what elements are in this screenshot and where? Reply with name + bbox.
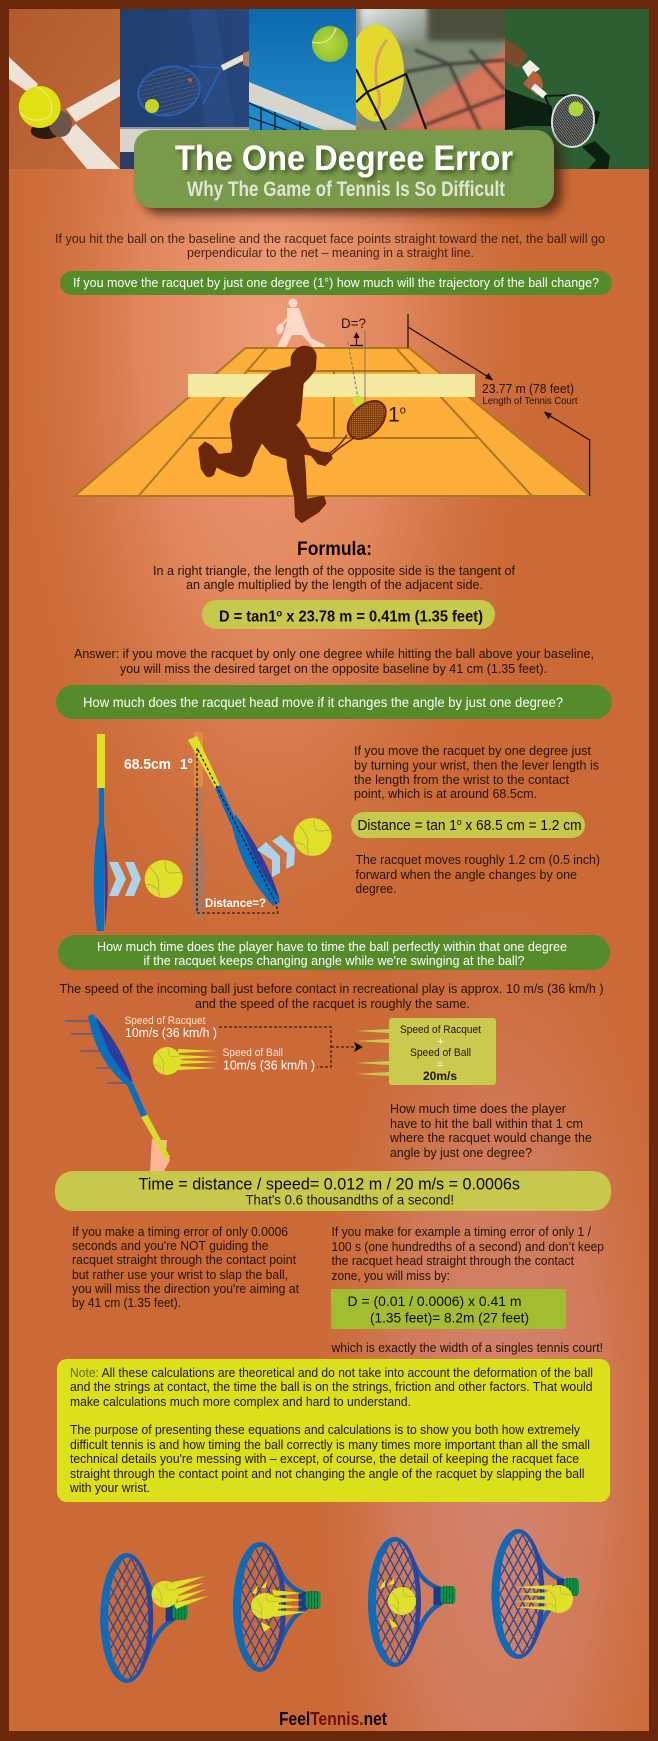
miss distance box: [331, 1289, 566, 1329]
intro text: If you hit the ball on the baseline and the racquet face points straight toward the net, the ball will go: [55, 232, 605, 246]
note panel: straight through the contact point and not changing the angle of the racquet by slapping the ball: [70, 1467, 584, 1481]
incoming ball speed text: [60, 982, 604, 1011]
timing error left text: If you make a timing error of only 0.0006: [72, 1225, 288, 1239]
icon: far player silhouette: [275, 298, 325, 347]
racquet movement text: degree.: [356, 882, 396, 896]
question bar 3: if the racquet keeps changing angle while we're swinging at the ball?: [144, 953, 524, 968]
timing error left text: [72, 1225, 300, 1310]
timing error left text: by 41 cm (1.35 feet).: [72, 1296, 181, 1310]
subtitle: Why The Game of Tennis Is So Difficult: [187, 178, 505, 201]
formula pill: D = tan1: [219, 608, 280, 626]
icon: chevrons left: [109, 862, 141, 896]
time pill: Time = distance / speed= 0.012 m / 20 m/s = 0.0006s: [138, 1174, 520, 1194]
question bar 1: If you move the racquet by just one degree (1°) how much will the trajectory of the ball change?: [73, 275, 599, 290]
miss distance box: (1.35 feet)= 8.2m (27 feet): [370, 1310, 529, 1326]
label: lever length and angle: 1°: [180, 756, 193, 773]
question bar 2: [56, 685, 612, 719]
sum box speed trails: [356, 1029, 389, 1076]
note panel: difficult tennis is and how timing the ball correctly is many times more important than all the small: [70, 1438, 590, 1452]
icon: ball left: [145, 860, 183, 898]
label: speed of racquet: 10m/s (36 km/h ): [125, 1025, 217, 1040]
racquet sequence 1: ball leaving: [100, 1553, 209, 1683]
icon: chevrons right: [257, 835, 295, 877]
time pill: [55, 1171, 611, 1211]
label: speed of ball: 10m/s (36 km/h ): [223, 1058, 315, 1072]
racquet sequence 4: ball at rest behind strings: [492, 1529, 579, 1659]
note panel: and the strings at contact, the time the ball is on the strings, friction and other factors. That would: [70, 1380, 593, 1394]
distance pill: o: [457, 817, 462, 827]
question: time in 1 cm: have to hit the ball within that 1 cm: [390, 1117, 583, 1131]
lever explanation: the length from the wrist to the contact: [354, 773, 570, 787]
note panel: technical details you're messing with – except, of course, the detail of keeping the racquet face: [70, 1452, 579, 1466]
distance geometry dashes: [197, 748, 278, 913]
answer text: Answer: if you move the racquet by only one degree while hitting the ball above your baseline,: [74, 647, 594, 661]
note panel: The purpose of presenting these equations and calculations is to show you both how extremely: [70, 1423, 581, 1437]
lever explanation: by turning your wrist, then the lever length is: [354, 758, 599, 772]
timing error left text: racquet straight through the contact point: [72, 1253, 297, 1267]
title banner: [134, 130, 562, 214]
distance pill: x 68.5 cm = 1.2 cm: [462, 818, 582, 834]
label: one degree: 1: [388, 404, 400, 426]
label: one degree: o: [400, 404, 406, 416]
question: time in 1 cm: where the racquet would change the: [389, 1131, 592, 1145]
label: speed of ball: [222, 1047, 315, 1072]
timing error right text: If you make for example a timing error of only 1 /: [332, 1225, 592, 1239]
note panel: make calculations much more complex and hard to understand.: [70, 1395, 411, 1409]
answer text: you will miss the desired target on the opposite baseline by 41 cm (1.35 feet).: [120, 662, 547, 676]
lever explanation: [354, 744, 599, 801]
intro text: perpendicular to the net – meaning in a straight line.: [187, 246, 474, 260]
question bar 3: [58, 935, 610, 970]
icon: straight racquet side view: [94, 734, 108, 931]
label: speed of ball: Speed of Ball: [222, 1047, 283, 1059]
question: time in 1 cm: How much time does the player: [390, 1102, 566, 1116]
icon: ball right: [294, 818, 332, 856]
answer text: [74, 647, 594, 676]
sum box: Speed of Ball: [410, 1047, 471, 1059]
miss distance box: D = (0.01 / 0.0006) x 0.41 m: [348, 1293, 522, 1309]
incoming ball speed text: and the speed of the racquet is roughly the same.: [195, 997, 470, 1011]
photo: close-up of ball in net: [356, 9, 505, 130]
tennis court diagram: [75, 348, 590, 496]
label: speed of racquet: Speed of Racquet: [124, 1015, 206, 1027]
photo: ball on clay court line: [9, 9, 120, 169]
sum box: Speed of Racquet: [400, 1024, 481, 1036]
icon: racquet and ball: [325, 394, 393, 456]
distance pill: Distance = tan 1: [358, 818, 463, 834]
icon: near player silhouette: [199, 347, 332, 522]
trajectory lines and D marker: D=?: [341, 315, 366, 331]
photo: racquet hitting ball on blue background: [120, 9, 249, 169]
racquet movement text: [356, 853, 600, 896]
label: court length: [482, 381, 578, 407]
formula explanation: In a right triangle, the length of the opposite side is the tangent of: [153, 564, 516, 578]
photo: racquet on green court: [505, 9, 649, 169]
intro text: [55, 232, 605, 260]
sum box: 20m/s: [423, 1069, 457, 1083]
label: court length: Length of Tennis Court: [482, 395, 578, 407]
distance pill: [351, 812, 585, 838]
formula pill: x 23.78 m = 0.41m (1.35 feet): [282, 608, 483, 626]
question: time in 1 cm: angle by just one degree?: [390, 1146, 532, 1160]
icon: ball with speed trails: [153, 1047, 220, 1075]
lever explanation: point, which is at around 68.5cm.: [354, 787, 537, 801]
incoming ball speed text: The speed of the incoming ball just before contact in recreational play is approx. 10 m/s (36 km/h ): [60, 982, 604, 996]
time pill: That's 0.6 thousandths of a second!: [246, 1192, 454, 1208]
lever explanation: If you move the racquet by one degree just: [354, 744, 592, 758]
note panel: [57, 1359, 610, 1502]
formula explanation: an angle multiplied by the length of the adjacent side.: [186, 578, 483, 592]
racquet sequence 2: ball approaching strings: [233, 1542, 320, 1672]
timing error right text: zone, you will miss by:: [332, 1269, 450, 1283]
timing error left text: seconds and you're NOT guiding the: [72, 1239, 269, 1253]
icon: racquet with speed lines and hand: [65, 1014, 170, 1171]
formula explanation: [153, 564, 516, 592]
note panel: with your wrist.: [69, 1481, 150, 1495]
racquet movement text: forward when the angle changes by one: [356, 868, 577, 882]
sum box: =: [437, 1059, 443, 1071]
question bar 3: How much time does the player have to time the ball perfectly within that one degree: [97, 939, 567, 954]
note panel: Note: All these calculations are theoretical and do not take into account the deformation of the ball: [70, 1366, 593, 1380]
racquet movement text: The racquet moves roughly 1.2 cm (0.5 inch): [356, 853, 600, 867]
question bar 2: How much does the racquet head move if it changes the angle by just one degree?: [83, 695, 563, 710]
court length arrows: [408, 314, 590, 496]
icon: tilted racquet: [188, 736, 280, 906]
label: court length: 23.77 m (78 feet): [482, 381, 574, 396]
label: speed of racquet: [124, 1015, 217, 1040]
heading: formula: Formula:: [297, 539, 372, 560]
question bar 1: [60, 271, 612, 295]
timing error right text: 100 s (one hundredths of a second) and don’t keep: [332, 1240, 604, 1254]
trajectory lines and D marker: [341, 315, 366, 420]
timing error left text: you will miss the direction you're aiming at: [72, 1282, 300, 1296]
timing error right text: the racquet head straight through the contact: [332, 1254, 575, 1268]
question: time in 1 cm: [389, 1102, 592, 1160]
label: distance: Distance=?: [205, 896, 266, 910]
racquet sequence 3: ball in contact: [368, 1537, 456, 1667]
net band: [188, 374, 475, 397]
dashed connector arrow: [219, 1027, 363, 1067]
photo: ball over the net: [249, 9, 356, 130]
conclusion text: which is exactly the width of a singles tennis court!: [331, 1341, 603, 1355]
title: The One Degree Error: [175, 139, 513, 178]
formula pill: [202, 600, 495, 629]
icon: faded original racquet: [191, 732, 206, 920]
sum box: [389, 1018, 496, 1085]
sum box: +: [438, 1036, 444, 1048]
timing error left text: but rather use your wrist to slap the ball,: [72, 1268, 288, 1282]
footer logo: FeelTennis.net: [279, 1709, 387, 1729]
formula pill: o: [276, 608, 282, 620]
timing error right text: [332, 1225, 604, 1283]
label: lever length and angle: 68.5cm: [124, 756, 171, 773]
